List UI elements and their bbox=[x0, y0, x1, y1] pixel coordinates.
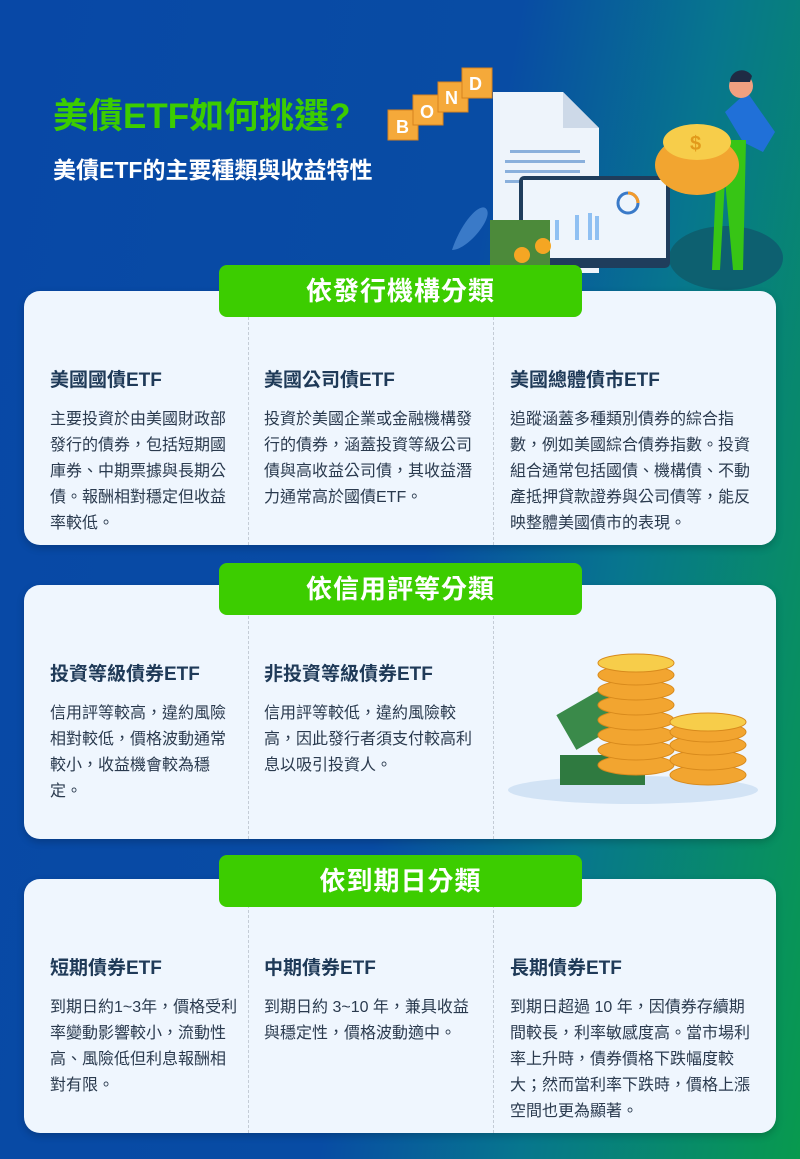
icon: coins and cash bbox=[508, 654, 758, 804]
column: 非投資等級債券ETF: 信用評等較低，違約風險較 bbox=[264, 705, 456, 722]
column: 美國總體債市ETF: 追蹤涵蓋多種類別債券的綜合指數，例如美國綜合債券指數。投資組合通常包括國債、機構債、不動產抵押貸款證券與公司債等，能反映整體美國債市的表現。 bbox=[510, 411, 750, 532]
column: 長期債券ETF: 到期日超過 10 年，因債券存續期 bbox=[510, 999, 745, 1016]
column: 長期債券ETF: 大；然而當利率下跌時，價格上漲 bbox=[510, 1077, 750, 1094]
illustration: bond, document, laptop, person: D bbox=[469, 74, 482, 94]
column: 美國國債ETF: 主要投資於由美國財政部發行的債券，包括短期國庫券、中期票據與長期公債。報酬相對穩定但收益率較低。 bbox=[50, 411, 226, 532]
column: 投資等級債券ETF: 信用評等較高，違約風險相對較低，價格波動通常較小，收益機會較為穩定。 bbox=[50, 705, 226, 800]
column: 非投資等級債券ETF: 高，因此發行者須支付較高利 bbox=[264, 731, 472, 748]
column: 短期債券ETF: 到期日約1~3年，價格受利率變動影響較小，流動性高、風險低但利息報酬相對有限。 bbox=[50, 999, 237, 1094]
column: 短期債券ETF bbox=[50, 958, 237, 1094]
tab heading: 依發行機構分類: 依發行機構分類 bbox=[306, 276, 495, 306]
illustration: bond, document, laptop, person bbox=[388, 68, 783, 290]
column: 美國國債ETF: 美國國債ETF bbox=[50, 370, 162, 391]
illustration: bond, document, laptop, person: $ bbox=[690, 133, 701, 155]
title: 美債ETF如何挑選? bbox=[53, 97, 350, 136]
column: 長期債券ETF: 長期債券ETF bbox=[510, 958, 622, 979]
column: 長期債券ETF: 率上升時，債券價格下跌幅度較 bbox=[510, 1051, 734, 1068]
illustration: bond, document, laptop, person: O bbox=[420, 102, 434, 122]
illustration: bond, document, laptop, person: B bbox=[396, 117, 409, 137]
subtitle: 美債ETF的主要種類與收益特性 bbox=[53, 157, 372, 183]
column: 非投資等級債券ETF bbox=[264, 664, 472, 774]
column: 中期債券ETF: 到期日約 3~10 年，兼具收益與穩定性，價格波動適中。 bbox=[264, 999, 469, 1042]
column: 長期債券ETF bbox=[510, 958, 750, 1120]
column: 投資等級債券ETF bbox=[50, 664, 226, 800]
column: 長期債券ETF: 間較長，利率敏感度高。當市場利 bbox=[510, 1025, 750, 1042]
column: 中期債券ETF: 中期債券ETF bbox=[264, 958, 376, 979]
column: 非投資等級債券ETF: 息以吸引投資人。 bbox=[264, 757, 392, 774]
tab heading: 依信用評等分類 bbox=[219, 563, 582, 615]
column: 美國總體債市ETF: 美國總體債市ETF bbox=[510, 370, 660, 391]
panel: 依到期日分類 bbox=[24, 879, 776, 1133]
column: 投資等級債券ETF: 投資等級債券ETF bbox=[50, 664, 200, 685]
panel: 依發行機構分類 bbox=[24, 291, 776, 545]
tab heading: 依發行機構分類 bbox=[219, 265, 582, 317]
column: 美國公司債ETF bbox=[264, 370, 472, 506]
panel: 依信用評等分類 bbox=[24, 585, 776, 839]
column: 美國公司債ETF: 美國公司債ETF bbox=[264, 370, 395, 391]
illustration: bond, document, laptop, person: N bbox=[445, 88, 458, 108]
column: 短期債券ETF: 短期債券ETF bbox=[50, 958, 162, 979]
column: 長期債券ETF: 空間也更為顯著。 bbox=[510, 1103, 638, 1120]
column: 中期債券ETF bbox=[264, 958, 469, 1042]
tab heading: 依到期日分類: 依到期日分類 bbox=[319, 866, 482, 896]
tab heading: 依信用評等分類: 依信用評等分類 bbox=[306, 574, 495, 604]
column: 美國公司債ETF: 投資於美國企業或金融機構發行的債券，涵蓋投資等級公司債與高收益公司債，其收益潛力通常高於國債ETF。 bbox=[264, 411, 472, 506]
column: 非投資等級債券ETF: 非投資等級債券ETF bbox=[264, 664, 433, 685]
tab heading: 依到期日分類 bbox=[219, 855, 582, 907]
